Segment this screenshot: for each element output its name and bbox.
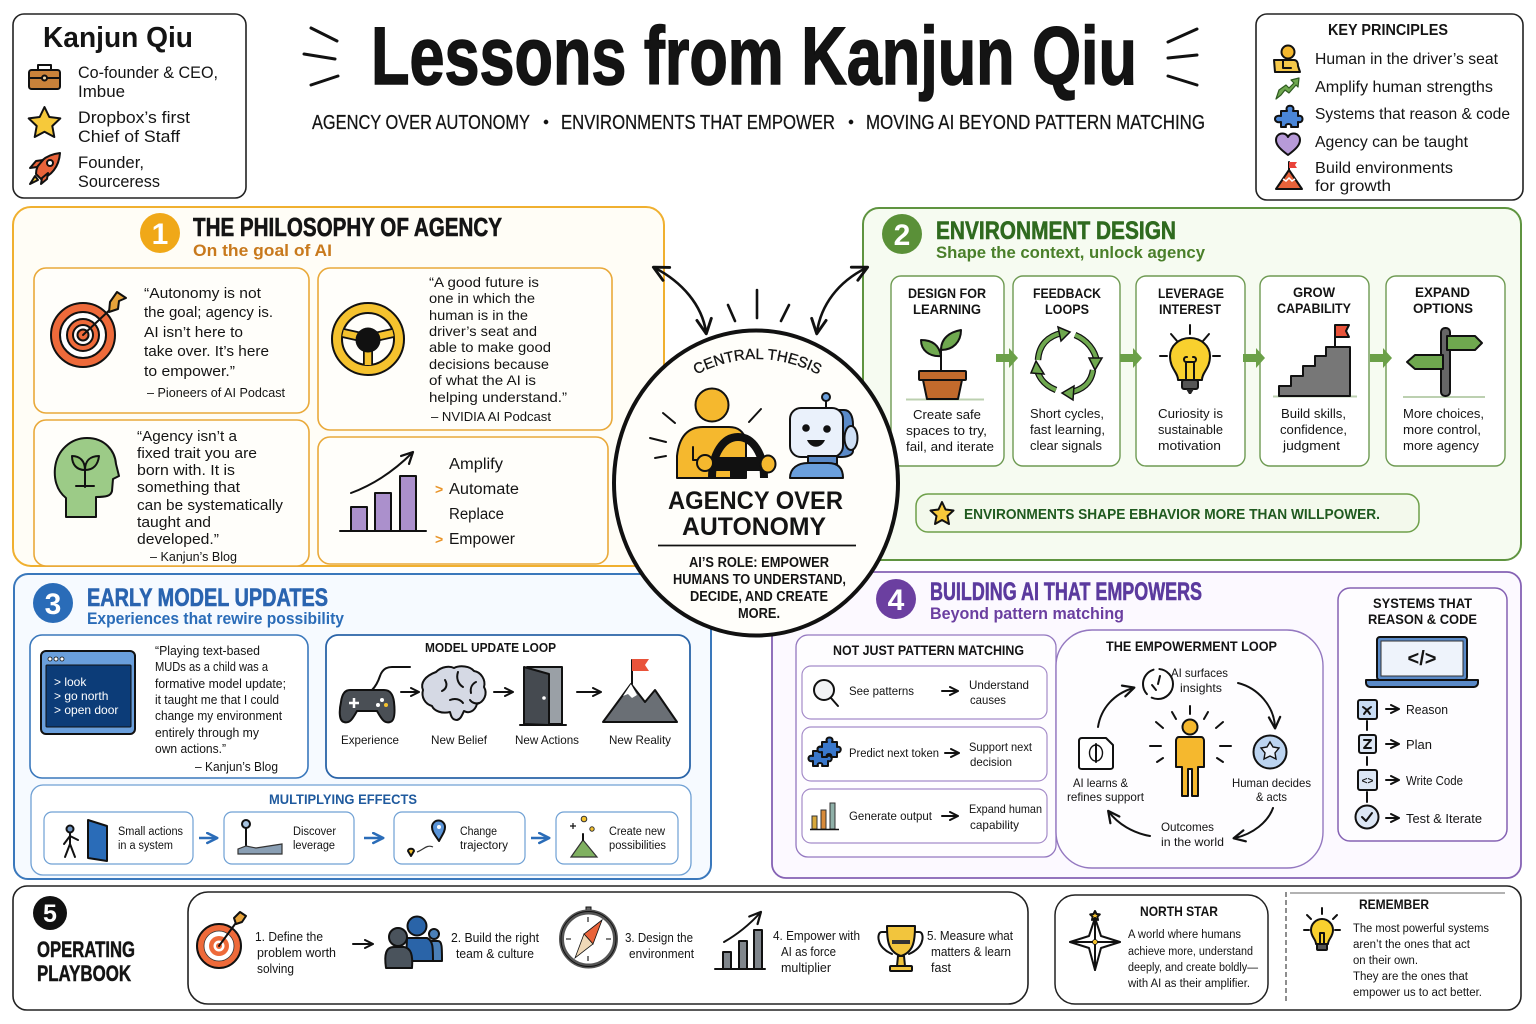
subtitle: MOVING AI BEYOND PATTERN MATCHING — [866, 112, 1205, 134]
icon: growth chart — [715, 913, 765, 969]
heading: early model updates: EARLY MODEL UPDATES — [87, 584, 328, 612]
card: feedback loops — [1013, 276, 1120, 466]
heading: agency over autonomy — [668, 487, 843, 541]
labels: loop steps: Experience — [341, 733, 399, 747]
heading: early model updates — [87, 584, 344, 628]
text: Sourceress role: Founder, — [78, 154, 144, 172]
icon: game controller — [340, 667, 410, 722]
step: small actions: in a system — [118, 840, 173, 852]
card: autonomy quote — [34, 268, 309, 413]
text: principle 3: Systems that reason & code — [1315, 106, 1510, 123]
text: MUD quote: MUDs as a child was a — [155, 660, 268, 674]
badge: 5: 5 — [43, 900, 57, 928]
text: human decides — [1232, 776, 1311, 804]
icon: potted plant — [906, 330, 984, 400]
arrow: effects 3 to 4 — [531, 837, 548, 839]
text: north star: A world where humans — [1128, 929, 1241, 941]
badge: 1 — [140, 213, 180, 253]
card: playbook steps — [188, 892, 1028, 1004]
icon: callout star — [930, 502, 954, 524]
card: the empowerment loop — [1056, 630, 1323, 868]
icon: light bulb — [1160, 325, 1220, 394]
badge: 2: 2 — [894, 219, 910, 252]
text: outcomes: in the world — [1161, 835, 1224, 849]
text: AI surfaces insights: insights — [1180, 681, 1222, 695]
badge: 4 — [876, 579, 916, 619]
row: see patterns: Understand — [969, 678, 1029, 692]
step: 2 — [451, 931, 540, 961]
icon: growth arrow — [1276, 78, 1299, 99]
text: MUD quote — [155, 644, 286, 774]
heading: agency over autonomy: AUTONOMY — [682, 513, 826, 541]
text: AI learns — [1067, 776, 1145, 804]
text: taught quote: can be systematically — [137, 498, 284, 514]
card: leverage interest: LEVERAGE — [1158, 285, 1224, 301]
arrow: step 1 to 2 — [353, 943, 372, 945]
arrow: 1 to 2 — [996, 348, 1018, 368]
text: taught quote: – Kanjun’s Blog — [150, 550, 237, 564]
text: callout message: ENVIRONMENTS SHAPE EBHAVIOR MORE THAN WILLPOWER. — [964, 507, 1380, 523]
text: principle 2: Amplify human strengths — [1315, 79, 1493, 96]
text: AI's role: HUMANS TO UNDERSTAND, — [673, 572, 846, 588]
icon: trophy — [878, 926, 923, 971]
icon: seated person — [1274, 46, 1300, 72]
row: generate output: Generate output — [849, 811, 933, 823]
arrow: thesis to philosophy — [655, 268, 706, 332]
icon: heart — [1276, 133, 1300, 155]
icon: star — [29, 107, 60, 137]
step: 5: fast — [931, 961, 952, 975]
card: leverage interest — [1136, 276, 1245, 466]
badge: 5 — [33, 896, 67, 930]
text: autonomy quote: take over. It’s here — [144, 344, 269, 360]
arrow: outcomes to AI — [1109, 812, 1150, 836]
icon: compass — [561, 907, 616, 966]
title: Lessons from Kanjun Qiu — [371, 11, 1137, 102]
label: central thesis arc: CENTRAL THESIS — [694, 348, 822, 374]
text: Dropbox role — [78, 109, 190, 146]
card: expand options: EXPAND — [1415, 284, 1470, 300]
text: principle 5: for growth — [1315, 178, 1391, 195]
step: create new possibilities — [556, 812, 678, 864]
row: see patterns — [802, 666, 1047, 719]
list: reason plan code test: Write Code — [1406, 774, 1463, 788]
card: grow capability: GROW — [1293, 284, 1336, 300]
text: remember: aren’t the ones that act — [1353, 939, 1471, 951]
text: AI learns: refines support — [1067, 790, 1145, 804]
card: design for learning: DESIGN FOR — [908, 285, 986, 301]
labels: loop steps: New Belief — [431, 733, 488, 747]
icon: human decides badge — [1254, 736, 1286, 768]
text: MUD quote: change my environment — [155, 709, 283, 723]
card: grow capability: Build skills, — [1281, 406, 1346, 421]
text: role at Imbue — [78, 64, 218, 101]
text: remember: The most powerful systems — [1353, 923, 1489, 935]
heading: agency over autonomy: AGENCY OVER — [668, 487, 843, 515]
subtitle: ENVIRONMENTS THAT EMPOWER — [561, 112, 835, 134]
step: 2: 2. Build the right — [451, 931, 540, 945]
panel: remember — [1304, 897, 1489, 999]
icon: laptop: </> — [1408, 648, 1436, 670]
subtitle: AGENCY OVER AUTONOMY — [312, 112, 530, 134]
step: 4: 4. Empower with — [773, 929, 860, 943]
heading: operating playbook: PLAYBOOK — [37, 961, 131, 986]
icon: head with sprout — [55, 438, 119, 517]
card: amplify vs automate — [318, 437, 608, 564]
step: 1: solving — [257, 962, 294, 976]
heading: model update loop: MODEL UPDATE LOOP — [425, 640, 556, 655]
text: role at Imbue: Imbue — [78, 83, 125, 101]
arrow: 4 to 5 — [1370, 348, 1392, 368]
card: model update loop — [326, 635, 690, 778]
text: taught quote: taught and — [137, 515, 211, 531]
list: reason plan code test: Reason — [1406, 703, 1448, 717]
card: leverage interest: Curiosity is — [1158, 406, 1223, 421]
step: 5: matters & learn — [931, 945, 1011, 959]
row: predict next token: Predict next token — [849, 748, 939, 760]
text: taught quote: “Agency isn’t a — [137, 429, 237, 445]
icon: human figure with rays — [1150, 706, 1231, 796]
card: driver's seat quote — [318, 268, 612, 430]
list: amplify over automate, empower over replace: Replace — [449, 506, 504, 523]
labels: loop steps: New Actions — [515, 733, 579, 747]
text: principle 1: Human in the driver’s seat — [1315, 51, 1499, 68]
step: change trajectory: trajectory — [460, 840, 508, 852]
text: remember: on their own. — [1353, 955, 1418, 967]
text: taught quote: something that — [137, 480, 240, 496]
icon: terminal window: > go north — [54, 689, 108, 703]
row: predict next token: Support next — [969, 740, 1033, 754]
icon: cycle arrows — [1031, 327, 1102, 400]
icon: rocket — [30, 153, 60, 184]
icon: terminal window: > open door — [54, 703, 118, 717]
text: taught quote: born with. It is — [137, 463, 235, 479]
list: reason plan code test: Test & Iterate — [1406, 812, 1482, 826]
panel: profile card — [13, 14, 246, 198]
arrow: thesis to environment — [817, 268, 866, 332]
list: amplify over automate, empower over replace: Automate — [449, 481, 519, 498]
text: autonomy quote: to empower.” — [144, 364, 235, 380]
text: driver's seat quote: driver’s seat and — [429, 324, 537, 339]
list: amplify over automate, empower over replace: Empower — [449, 531, 515, 548]
heading: building AI — [930, 578, 1202, 623]
icon: steering wheel — [332, 303, 404, 375]
text: AI's role: AI’S ROLE: EMPOWER — [689, 555, 829, 571]
icon: brain — [422, 666, 486, 720]
heading: environment design — [936, 217, 1206, 262]
card: MUD quote — [30, 635, 308, 778]
card: expand options: OPTIONS — [1413, 300, 1473, 316]
text: outcomes — [1161, 820, 1224, 849]
arrow: effects 1 to 2 — [199, 837, 216, 839]
text: principle 5 — [1315, 160, 1453, 195]
heading: multiplying effects: MULTIPLYING EFFECTS — [269, 791, 417, 807]
icon: puzzle — [1275, 106, 1302, 127]
card: expand options: more control, — [1403, 422, 1481, 437]
card: feedback loops: FEEDBACK — [1033, 285, 1101, 301]
text: remember: They are the ones that — [1353, 971, 1469, 983]
heading: building AI: Beyond pattern matching — [930, 604, 1124, 623]
step: 5 — [927, 929, 1013, 975]
card: grow capability: judgment — [1282, 438, 1340, 453]
step: small actions: Small actions — [118, 826, 183, 838]
step: 1: 1. Define the — [255, 930, 323, 944]
arrow: actions to reality — [577, 691, 600, 693]
step: 1 — [255, 930, 336, 976]
text: AI's role — [658, 546, 856, 622]
card: design for learning: LEARNING — [913, 301, 981, 317]
card: design for learning: Create safe — [913, 407, 981, 422]
card: north star — [1055, 895, 1268, 1004]
icon: team — [385, 916, 442, 968]
list: reason plan code test — [1356, 700, 1482, 828]
card: leverage interest: sustainable — [1158, 422, 1223, 437]
list: reason plan code test: <> — [1362, 776, 1373, 787]
card: grow capability: CAPABILITY — [1277, 300, 1352, 316]
text: autonomy quote: AI isn’t here to — [144, 325, 243, 341]
arrow: human to outcomes — [1235, 808, 1273, 838]
step: discover leverage: leverage — [293, 840, 335, 852]
heading: philosophy: On the goal of AI — [193, 241, 332, 260]
card: expand options — [1386, 276, 1505, 466]
step: change trajectory: Change — [460, 826, 497, 838]
heading: systems: REASON & CODE — [1368, 611, 1477, 627]
card: grow capability — [1260, 276, 1369, 466]
icon: target — [51, 292, 126, 367]
arrow: AI to insights — [1098, 688, 1133, 727]
text: north star: with AI as their amplifier. — [1127, 978, 1250, 990]
list: amplify over automate, empower over replace — [435, 456, 519, 548]
heading: philosophy — [193, 212, 502, 260]
list: amplify over automate, empower over replace: > — [435, 481, 443, 497]
text: AI learns: AI learns & — [1073, 776, 1128, 790]
heading: early model updates: Experiences that rewire possibility — [87, 609, 344, 628]
icon: terminal window — [41, 651, 135, 734]
panel: 4 building AI that empowers — [772, 572, 1521, 878]
card: expand options: More choices, — [1403, 406, 1484, 421]
text: driver's seat quote: – NVIDIA AI Podcast — [431, 410, 552, 424]
step: 4: multiplier — [781, 961, 831, 975]
card: design for learning — [891, 276, 1004, 466]
text: north star — [1127, 929, 1258, 990]
step: 1: problem worth — [257, 946, 336, 960]
heading: key principles: KEY PRINCIPLES — [1328, 22, 1448, 39]
icon: mountain with flag — [603, 659, 677, 722]
step: 3: environment — [629, 947, 694, 961]
text: MUD quote: – Kanjun’s Blog — [195, 760, 278, 774]
row: see patterns: causes — [970, 693, 1006, 707]
row: generate output: Expand human — [969, 802, 1042, 816]
panel: 1 philosophy of agency — [13, 207, 664, 566]
heading: remember: REMEMBER — [1359, 897, 1429, 912]
step: 4 — [773, 929, 860, 975]
row: generate output — [802, 789, 1047, 843]
text: driver's seat quote — [429, 275, 567, 424]
icon: insights — [1143, 669, 1173, 699]
text: driver's seat quote: human is in the — [429, 308, 528, 323]
row: see patterns: See patterns — [849, 686, 914, 698]
heading: environment design: Shape the context, unlock agency — [936, 243, 1206, 262]
step: 5: 5. Measure what — [927, 929, 1013, 943]
list: amplify over automate, empower over replace: > — [435, 531, 443, 547]
icon: door — [520, 667, 566, 725]
panel: 3 early model updates — [14, 574, 711, 879]
heading: environment design: ENVIRONMENT DESIGN — [936, 217, 1176, 245]
text: AI surfaces insights: AI surfaces — [1171, 666, 1228, 680]
text: driver's seat quote: helping understand.” — [429, 390, 567, 405]
icon: title rays left — [304, 28, 338, 85]
step: discover leverage — [224, 812, 354, 864]
text: AI surfaces insights — [1171, 666, 1228, 695]
text: role at Imbue: Co-founder & CEO, — [78, 64, 218, 82]
card: expand options: more agency — [1403, 438, 1479, 453]
step: create new possibilities: Create new — [609, 826, 666, 838]
heading: philosophy: THE PHILOSOPHY OF AGENCY — [193, 212, 502, 242]
card: systems that reason and code — [1338, 588, 1507, 841]
step: create new possibilities: possibilities — [609, 840, 666, 852]
card: grow capability: confidence, — [1280, 422, 1347, 437]
step: 3: 3. Design the — [625, 931, 693, 945]
text: taught quote: fixed trait you are — [137, 446, 257, 462]
card: agency can be taught quote — [34, 420, 309, 566]
text: driver's seat quote: decisions because — [429, 357, 549, 372]
text: remember: empower us to act better. — [1353, 987, 1482, 999]
icon: laptop — [1366, 637, 1478, 687]
icon: thesis rays — [728, 290, 789, 321]
chart: rising bars — [340, 453, 426, 531]
card: multiplying effects — [31, 785, 691, 875]
panel: key principles — [1256, 14, 1523, 200]
card: feedback loops: Short cycles, — [1030, 406, 1104, 421]
panel: 2 environment design — [863, 208, 1521, 560]
text: driver's seat quote: one in which the — [429, 291, 535, 306]
arrow: insights to human — [1238, 683, 1275, 727]
text: human decides: Human decides — [1232, 776, 1311, 790]
heading: name: Kanjun Qiu — [43, 22, 193, 54]
callout: environments shape behavior — [916, 494, 1419, 532]
text: MUD quote: formative model update; — [155, 677, 286, 691]
arrow: experience to belief — [401, 691, 418, 693]
step: 4: AI as force — [781, 945, 836, 959]
badge: 1: 1 — [152, 218, 168, 251]
arrow: 3 to 4 — [1243, 348, 1265, 368]
step: discover leverage: Discover — [293, 826, 336, 838]
heading: not just pattern matching: NOT JUST PATTERN MATCHING — [833, 642, 1024, 658]
step: change trajectory — [394, 812, 525, 864]
text: driver's seat quote: able to make good — [429, 340, 551, 355]
card: feedback loops: clear signals — [1030, 438, 1102, 453]
text: autonomy quote: – Pioneers of AI Podcast — [147, 386, 286, 400]
icon: remember bulb — [1304, 908, 1340, 950]
row: predict next token — [802, 727, 1047, 781]
badge: 3: 3 — [45, 588, 61, 621]
text: MUD quote: own actions.” — [155, 742, 226, 756]
text: human decides: & acts — [1256, 790, 1287, 804]
text: outcomes: Outcomes — [1161, 820, 1214, 834]
icon: title rays right — [1168, 29, 1197, 85]
heading: building AI: BUILDING AI THAT EMPOWERS — [930, 578, 1202, 606]
labels: loop steps: New Reality — [609, 733, 671, 747]
icon: playbook target — [197, 912, 246, 968]
text: autonomy quote: the goal; agency is. — [144, 305, 273, 321]
text: MUD quote: “Playing text-based — [155, 644, 260, 658]
icon: mountain flag — [1276, 162, 1302, 189]
icon: signpost — [1403, 328, 1485, 397]
text: Dropbox role: Chief of Staff — [78, 128, 180, 146]
labels: loop steps — [341, 733, 671, 747]
step: small actions — [44, 812, 193, 864]
badge: 4: 4 — [888, 584, 905, 617]
text: Dropbox role: Dropbox’s first — [78, 109, 190, 127]
row: predict next token: decision — [970, 755, 1012, 769]
card: leverage interest: motivation — [1158, 438, 1221, 453]
text: north star: achieve more, understand — [1128, 946, 1253, 958]
arrow: effects 2 to 3 — [364, 837, 382, 839]
card: not just pattern matching — [796, 635, 1056, 857]
text: north star: deeply, and create boldly— — [1128, 962, 1258, 974]
list: reason plan code test: Plan — [1406, 738, 1432, 752]
badge: 2 — [882, 214, 922, 254]
card: design for learning: fail, and iterate — [906, 439, 994, 454]
text: principle 4: Agency can be taught — [1315, 134, 1469, 151]
heading: operating playbook — [37, 937, 135, 986]
text: driver's seat quote: “A good future is — [429, 275, 539, 290]
icon: north star compass — [1070, 911, 1120, 970]
text: remember — [1353, 923, 1489, 999]
icon: stairs with flag — [1273, 325, 1357, 396]
arrow: belief to actions — [494, 691, 512, 693]
icon: briefcase — [29, 65, 60, 89]
card: feedback loops: LOOPS — [1045, 301, 1089, 317]
row: generate output: capability — [970, 818, 1019, 832]
heading: systems — [1368, 595, 1477, 627]
icon: robot — [790, 393, 858, 478]
text: MUD quote: it taught me that I could — [155, 693, 279, 707]
heading: operating playbook: OPERATING — [37, 937, 135, 962]
text: principle 5: Build environments — [1315, 160, 1453, 177]
heading: north star: NORTH STAR — [1140, 903, 1218, 919]
subtitle — [312, 112, 1205, 134]
text: AI's role: DECIDE, AND CREATE — [690, 589, 828, 605]
panel: central thesis — [612, 328, 900, 638]
panel: 5 operating playbook — [13, 886, 1521, 1010]
text: AI's role: MORE. — [738, 606, 780, 622]
icon: human at the wheel — [650, 388, 776, 478]
badge: 3 — [33, 583, 73, 623]
text: autonomy quote: “Autonomy is not — [144, 286, 261, 302]
heading: empowerment loop: THE EMPOWERMENT LOOP — [1106, 638, 1277, 654]
text: autonomy quote — [144, 286, 286, 400]
text: Sourceress role: Sourceress — [78, 173, 160, 191]
text: taught quote: developed.” — [137, 532, 219, 548]
icon: AI document — [1079, 738, 1113, 769]
text: taught quote — [137, 429, 284, 564]
step: 2: team & culture — [456, 947, 534, 961]
card: design for learning: spaces to try, — [906, 423, 987, 438]
heading: systems: SYSTEMS THAT — [1373, 595, 1472, 611]
text: driver's seat quote: of what the AI is — [429, 373, 536, 388]
text: MUD quote: entirely through my — [155, 726, 260, 740]
arrow: 2 to 3 — [1120, 348, 1142, 368]
card: feedback loops: fast learning, — [1030, 422, 1105, 437]
list: amplify over automate, empower over replace: Amplify — [449, 456, 503, 473]
text: Sourceress role — [78, 154, 160, 191]
step: 3 — [625, 931, 694, 961]
icon: terminal window: > look — [54, 675, 87, 689]
card: leverage interest: INTEREST — [1159, 301, 1221, 317]
